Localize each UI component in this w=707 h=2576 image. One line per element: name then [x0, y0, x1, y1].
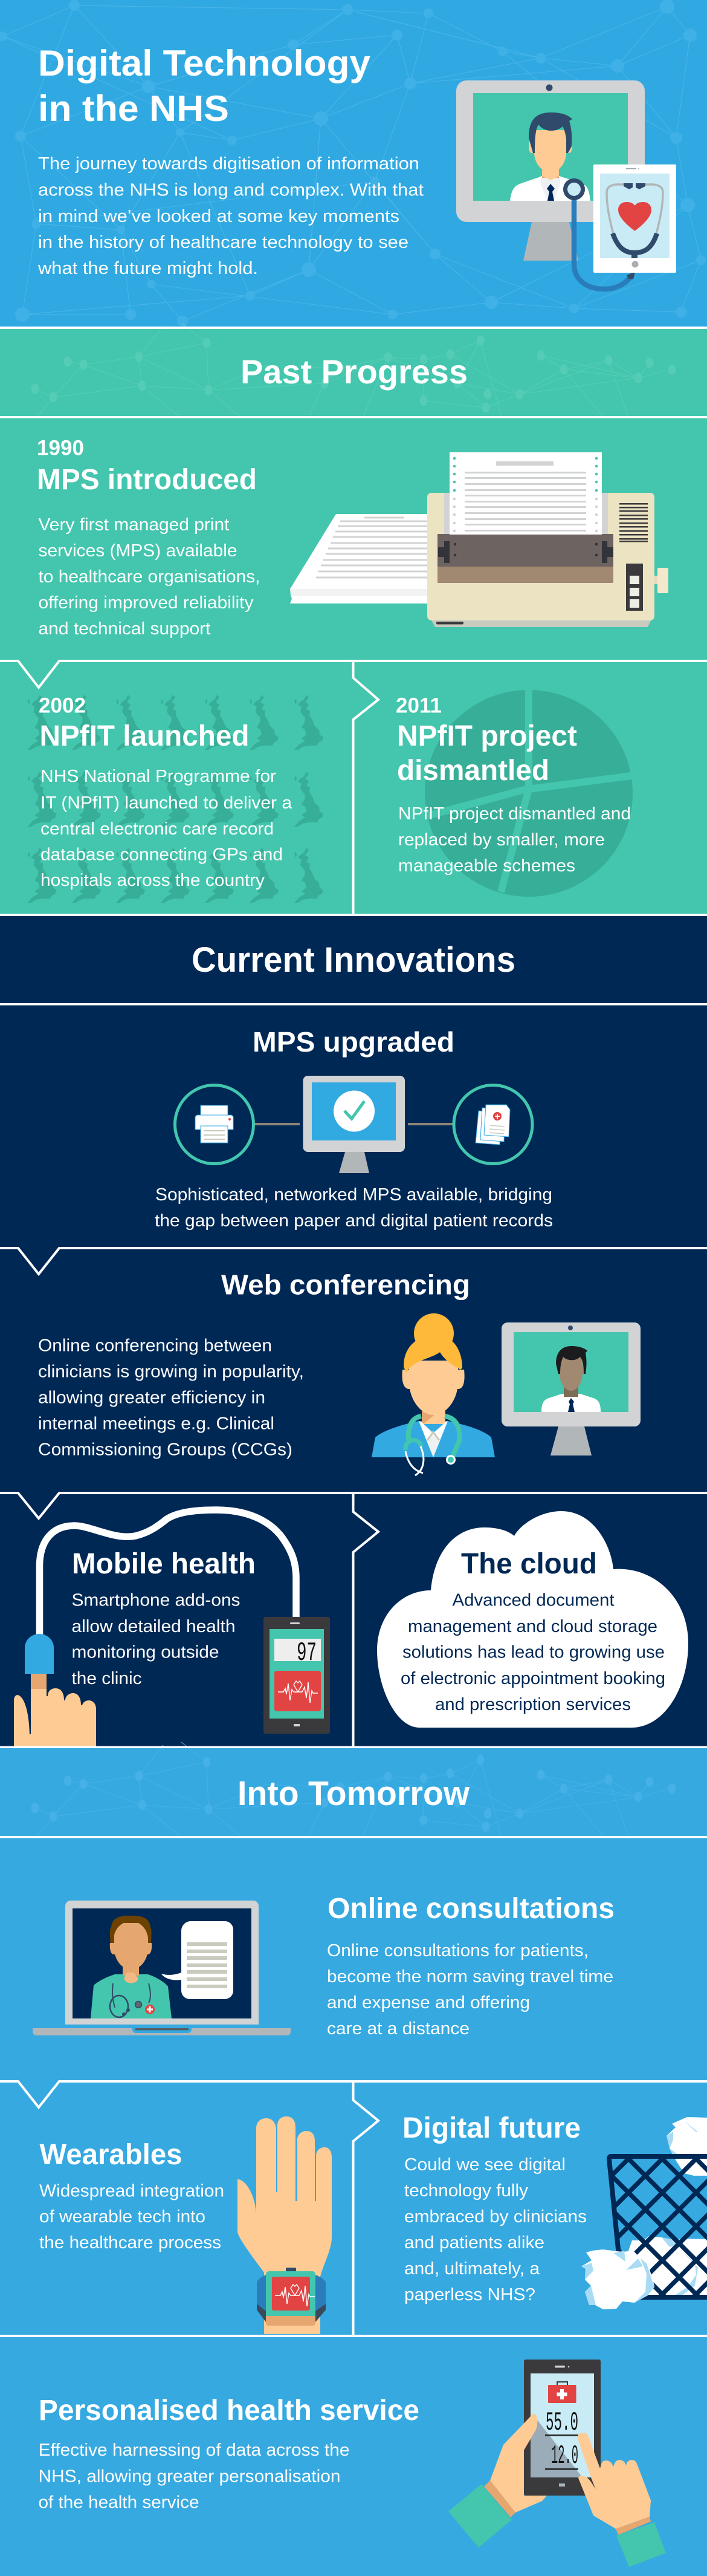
- title: [38, 43, 371, 129]
- text: mobile health: the clinic: [71, 1669, 141, 1688]
- phone readings: 55.0: [546, 2408, 578, 2438]
- text: online consultations: and expense and offering: [327, 1993, 530, 2012]
- text: 1990 MPS introduced: 1990: [37, 437, 84, 460]
- intro text: in mind we’ve looked at some key moments: [38, 207, 399, 226]
- heading: Into Tomorrow: Into Tomorrow: [237, 1774, 470, 1813]
- heading: Current Innovations: Current Innovations: [192, 940, 515, 980]
- band: Past Progress: [0, 329, 707, 416]
- divider with notch and chevron: [0, 661, 707, 914]
- heading: Web conferencing: Web conferencing: [221, 1269, 470, 1300]
- intro text: what the future might hold.: [37, 259, 258, 278]
- illustration: waste paper bin: [581, 2117, 707, 2309]
- text: web conferencing description: internal meetings e.g. Clinical: [38, 1414, 274, 1433]
- text: 2002 NPfIT launched: [39, 694, 292, 890]
- shape: cloud panel: [377, 1511, 688, 1728]
- text: mobile health: allow detailed health: [71, 1617, 236, 1636]
- illustration: doctor on monitor: [502, 1322, 641, 1456]
- text: the cloud: and prescription services: [435, 1695, 631, 1714]
- title: Digital Technology: [38, 43, 371, 83]
- illustration: dot matrix printer: [290, 452, 668, 627]
- text: personalised health service: of the health service: [39, 2493, 199, 2512]
- text: MPS upgraded description: Sophisticated, networked MPS available, bridging: [155, 1185, 552, 1205]
- text: 2011 NPfIT project dismantled: 2011: [396, 694, 442, 717]
- text: personalised health service: [39, 2395, 419, 2512]
- panel: into tomorrow: [0, 1748, 707, 2576]
- doctor: [510, 112, 590, 201]
- diagram: printer to monitor to records: [175, 1076, 532, 1173]
- text: online consultations: care at a distance: [327, 2019, 470, 2038]
- text: digital future: paperless NHS?: [404, 2285, 535, 2304]
- divider: [0, 2335, 707, 2337]
- connectors: [255, 1123, 453, 1125]
- printer body: [427, 493, 668, 627]
- title: in the NHS: [38, 88, 229, 129]
- divider with notch and chevron: [0, 2081, 707, 2335]
- speech bubble: [161, 1921, 233, 1999]
- background: network pattern past progress: [31, 323, 676, 418]
- text: 1990 MPS introduced: offering improved reliability: [39, 593, 254, 613]
- text: web conferencing description: clinicians is growing in popularity,: [38, 1362, 304, 1381]
- text: personalised health service: Personalised health service: [39, 2395, 419, 2427]
- text: mobile health: [71, 1548, 256, 1688]
- heading: MPS upgraded: MPS upgraded: [253, 1026, 454, 1058]
- icon: heart: [618, 202, 651, 231]
- icon: records circle: [454, 1085, 532, 1163]
- text: wearables: [39, 2139, 224, 2252]
- text: the cloud: solutions has lead to growing use: [402, 1642, 665, 1662]
- doctor in scrubs: [91, 1916, 172, 2018]
- text: 2011 NPfIT project dismantled: dismantled: [397, 755, 549, 787]
- divider with notch: [0, 1248, 707, 1274]
- panel: past progress content: [0, 418, 707, 914]
- icon: smartphone with reading: [263, 1617, 330, 1734]
- text: 2002 NPfIT launched: 2002: [39, 694, 86, 717]
- text: 2002 NPfIT launched: database connecting GPs and: [40, 845, 283, 865]
- icon: monitor check: [303, 1076, 405, 1173]
- illustration: hands holding phone: [448, 2360, 666, 2567]
- illustration: laptop doctor consultation: [33, 1901, 291, 2035]
- printer controls: [438, 503, 648, 611]
- illustration: hand with smartwatch: [237, 2116, 332, 2334]
- text: web conferencing description: Online conferencing between: [38, 1336, 272, 1356]
- divider with notch and chevron: [0, 1493, 707, 1747]
- text: 2011 NPfIT project dismantled: manageable schemes: [398, 856, 575, 876]
- text: online consultations: become the norm saving travel time: [327, 1967, 613, 1986]
- text: 2002 NPfIT launched: NPfIT launched: [40, 720, 249, 752]
- text: MPS upgraded description: [155, 1185, 553, 1231]
- text: 1990 MPS introduced: to healthcare organisations,: [39, 567, 260, 587]
- illustration: doctor on monitor with tablet and stethoscope: [456, 80, 676, 289]
- text: 2011 NPfIT project dismantled: [396, 694, 631, 876]
- text: online consultations: Online consultations for patients,: [327, 1941, 589, 1960]
- paper stack: [290, 514, 428, 603]
- text: the cloud: of electronic appointment booking: [401, 1669, 665, 1688]
- text: digital future: technology fully: [404, 2181, 529, 2200]
- paper ball above bin: [667, 2117, 707, 2176]
- intro text: [37, 154, 424, 278]
- text: digital future: Could we see digital: [404, 2155, 566, 2174]
- heading: Past Progress: Past Progress: [241, 353, 468, 391]
- text: 2011 NPfIT project dismantled: NPfIT project: [397, 720, 577, 752]
- text: wearables: Widespread integration: [39, 2182, 224, 2201]
- hand: [237, 2116, 332, 2334]
- background: uk map pattern: [28, 695, 323, 903]
- illustration: pulse oximeter cable: [14, 1510, 296, 1747]
- monitor: [456, 80, 645, 261]
- chart: dismantled pie graphic: [425, 686, 636, 897]
- text: online consultations: Online consultations: [328, 1893, 615, 1925]
- text: the cloud: management and cloud storage: [408, 1617, 657, 1636]
- left hand: [448, 2414, 547, 2548]
- phone readings: [545, 2408, 578, 2471]
- text: 1990 MPS introduced: Very first managed print: [39, 515, 230, 535]
- paper in bin: [628, 2236, 707, 2295]
- text: web conferencing description: [38, 1336, 304, 1460]
- bin wire mesh: [613, 2159, 707, 2295]
- text: the cloud: Advanced document: [452, 1590, 614, 1610]
- text: MPS upgraded description: the gap between paper and digital patient records: [155, 1211, 553, 1231]
- icon: first aid kit: [548, 2382, 576, 2403]
- cable: [40, 1510, 296, 1636]
- text: mobile health: Smartphone add-ons: [71, 1590, 241, 1610]
- illustration: female clinician: [372, 1313, 495, 1475]
- text: digital future: [402, 2112, 587, 2304]
- text: personalised health service: NHS, allowing greater personalisation: [39, 2467, 341, 2487]
- hand: [14, 1688, 96, 1747]
- text: wearables: the healthcare process: [39, 2233, 221, 2252]
- text: online consultations: [327, 1893, 615, 2038]
- paper ball front: [581, 2249, 654, 2309]
- laptop: [33, 1901, 291, 2035]
- text: 2002 NPfIT launched: hospitals across the country: [40, 871, 265, 890]
- background: network pattern hero: [0, 0, 706, 327]
- text: mobile health: monitoring outside: [71, 1642, 219, 1662]
- intro text: The journey towards digitisation of information: [38, 154, 419, 174]
- text: 1990 MPS introduced: MPS introduced: [37, 464, 257, 496]
- text: 1990 MPS introduced: and technical support: [39, 619, 210, 639]
- right hand: [578, 2433, 666, 2567]
- bin frame: [609, 2156, 707, 2297]
- text: digital future: and patients alike: [404, 2233, 544, 2252]
- text: web conferencing description: Commissioning Groups (CCGs): [38, 1440, 292, 1460]
- text: digital future: and, ultimately, a: [404, 2259, 540, 2278]
- text: 1990 MPS introduced: [37, 437, 260, 639]
- text: 2002 NPfIT launched: NHS National Programme for: [40, 767, 276, 786]
- icon: smartphone with reading: 97: [297, 1638, 317, 1668]
- text: web conferencing description: allowing greater efficiency in: [38, 1388, 265, 1408]
- panel: current innovations: [0, 914, 707, 1748]
- text: personalised health service: Effective harnessing of data across the: [39, 2441, 349, 2460]
- text: wearables: Wearables: [40, 2139, 182, 2171]
- text: 1990 MPS introduced: services (MPS) available: [39, 541, 237, 561]
- finger cap: [31, 1674, 47, 1689]
- intro text: in the history of healthcare technology to see: [38, 233, 408, 252]
- text: wearables: of wearable tech into: [39, 2207, 205, 2226]
- phone: 12.0: [551, 2441, 578, 2471]
- printed sheet: [450, 452, 602, 535]
- intro text: across the NHS is long and complex. With that: [38, 180, 424, 200]
- text: 2002 NPfIT launched: IT (NPfIT) launched to deliver a: [40, 793, 292, 813]
- tablet: [566, 164, 676, 289]
- text: 2011 NPfIT project dismantled: NPfIT project dismantled and: [398, 804, 631, 824]
- text: mobile health: Mobile health: [72, 1548, 256, 1580]
- text: digital future: Digital future: [402, 2112, 581, 2144]
- text: digital future: embraced by clinicians: [404, 2207, 587, 2226]
- background: network pattern into tomorrow: [31, 1742, 676, 1837]
- text: 2011 NPfIT project dismantled: replaced by smaller, more: [398, 830, 605, 850]
- text: the cloud: The cloud: [461, 1548, 597, 1580]
- icon: printer circle: [175, 1085, 254, 1163]
- text: 2002 NPfIT launched: central electronic care record: [40, 819, 274, 839]
- text: the cloud: [401, 1548, 665, 1714]
- smartwatch: [257, 2268, 326, 2326]
- phone: [524, 2360, 601, 2496]
- background: hero panel: [0, 0, 707, 327]
